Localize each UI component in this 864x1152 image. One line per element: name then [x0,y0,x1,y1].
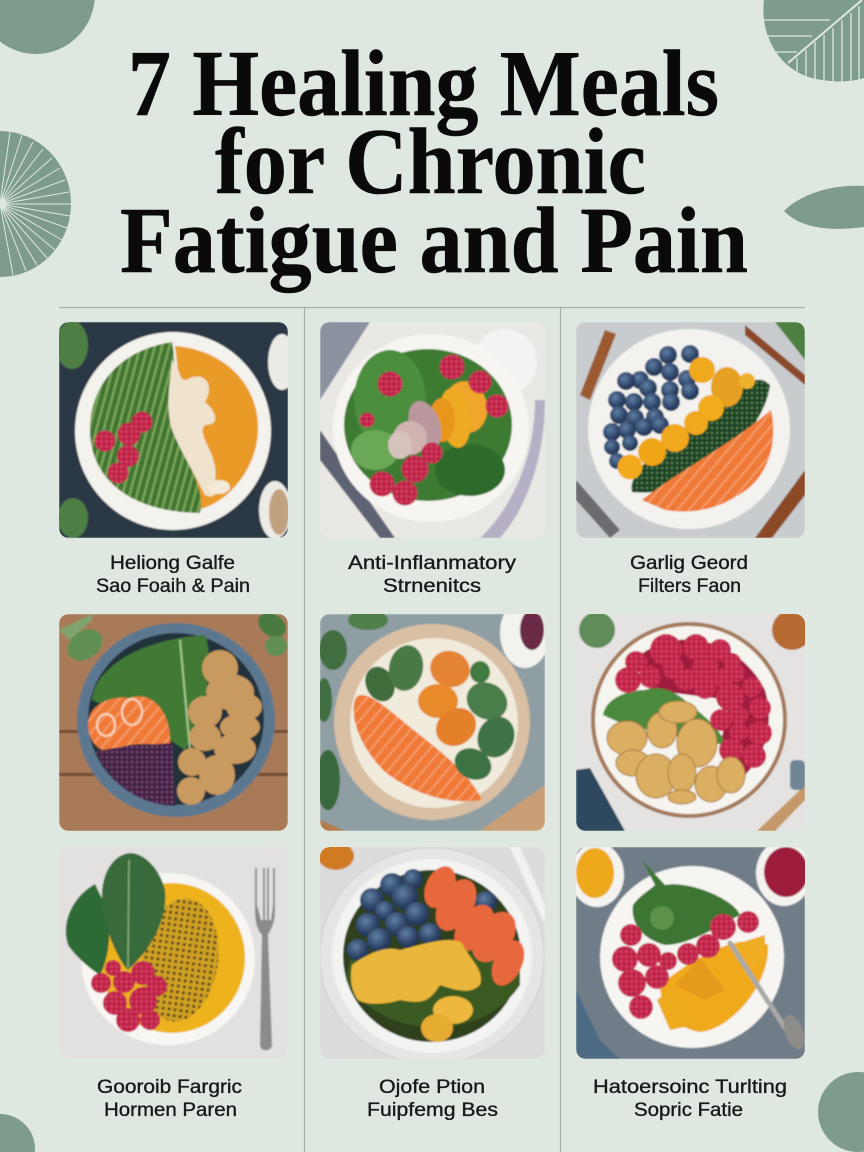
label: meal 7: Gooroib Fargric [97,1077,242,1098]
salmon pieces [423,865,526,987]
berry underlay [640,640,769,775]
label: meal 3: Garlig Geord [630,553,748,574]
meal photo 5: salmon on cream plate [320,614,545,831]
blueberries [603,345,699,469]
title: for Chronic [215,110,646,214]
meal photo 7: yellow soup, leaves, raspberries [64,852,276,1052]
meal photo 2: greens, berries, orange slices [320,322,545,538]
label: meal 9 [593,1077,787,1121]
golden chunks [351,940,481,1004]
label: meal 9: Hatoersoinc Turlting [593,1077,787,1098]
label: meal 8 [367,1077,498,1121]
purple rice [96,743,175,806]
title [120,32,748,293]
meal photo 4: salmon, greens, rice, patties [59,607,291,831]
label: meal 2 [348,553,517,597]
cream swirl [168,360,218,496]
label: meal 7 [97,1077,242,1121]
label: meal 2: Anti-Inflanmatory [348,553,517,574]
spinach [364,666,396,702]
title: 7 Healing Meals [128,32,719,136]
orange soup [175,346,258,510]
plate [591,622,787,818]
decoration: bottom-right blob [818,1072,864,1152]
salmon [88,696,170,752]
potato slices [607,701,745,804]
label: meal 1: Heliong Galfe [110,553,235,574]
bowl [81,873,255,1045]
spoon [730,943,793,1040]
raspberries [91,973,111,993]
label: meal 2: Strnenitcs [383,576,481,597]
label: meal 8: Ojofe Ption [379,1077,485,1098]
meal photo 9: raspberries, greens, mango, spoon [570,840,812,1059]
bowl [600,866,784,1048]
label: meal 3: Filters Faon [638,576,741,597]
patties [177,650,262,805]
green [603,688,725,745]
leaves [66,884,109,975]
label: meal 3 [630,553,748,597]
seeds [142,898,220,1022]
orange slices [449,380,488,434]
squash rounds [689,357,715,383]
berries [615,634,772,768]
label: meal 7: Hormen Paren [104,1100,237,1121]
orange pieces [429,650,471,688]
meal photo 3: blueberries, squash, salmon [576,322,805,538]
fork [255,868,275,1050]
decoration: bottom-left blob [0,1114,35,1152]
mango chunks [675,958,725,1000]
blueberries [380,873,404,897]
salmon fillet [354,695,482,801]
salmon [642,410,773,511]
meal photo 1: greens and orange soup [56,321,296,539]
decoration: top-right striped leaf [763,0,864,82]
salad leaves [344,349,512,501]
label: meal 1: Sao Foaih & Pain [96,576,250,597]
label: meal 1 [96,553,250,597]
title: Fatigue and Pain [120,189,748,293]
plate [334,624,530,820]
mango sauce [660,941,768,1032]
label: meal 9: Sopric Fatie [634,1100,743,1121]
mushrooms [408,400,443,446]
green noodles [90,342,201,513]
kale [92,635,209,750]
meal photo 8: blueberries, salmon, golden chunks [318,842,545,1064]
bowl [332,859,532,1053]
decoration: top-left blob [0,0,95,54]
meal photo 6: raspberries and potato slices [576,610,812,831]
blue bowl [77,623,275,817]
decoration: right leaf [784,186,864,229]
decoration: left sunburst [0,131,71,277]
kale band [631,380,770,493]
label: meal 8: Fuipfemg Bes [367,1100,498,1121]
raspberries [620,924,642,946]
green vegetable [633,860,740,945]
